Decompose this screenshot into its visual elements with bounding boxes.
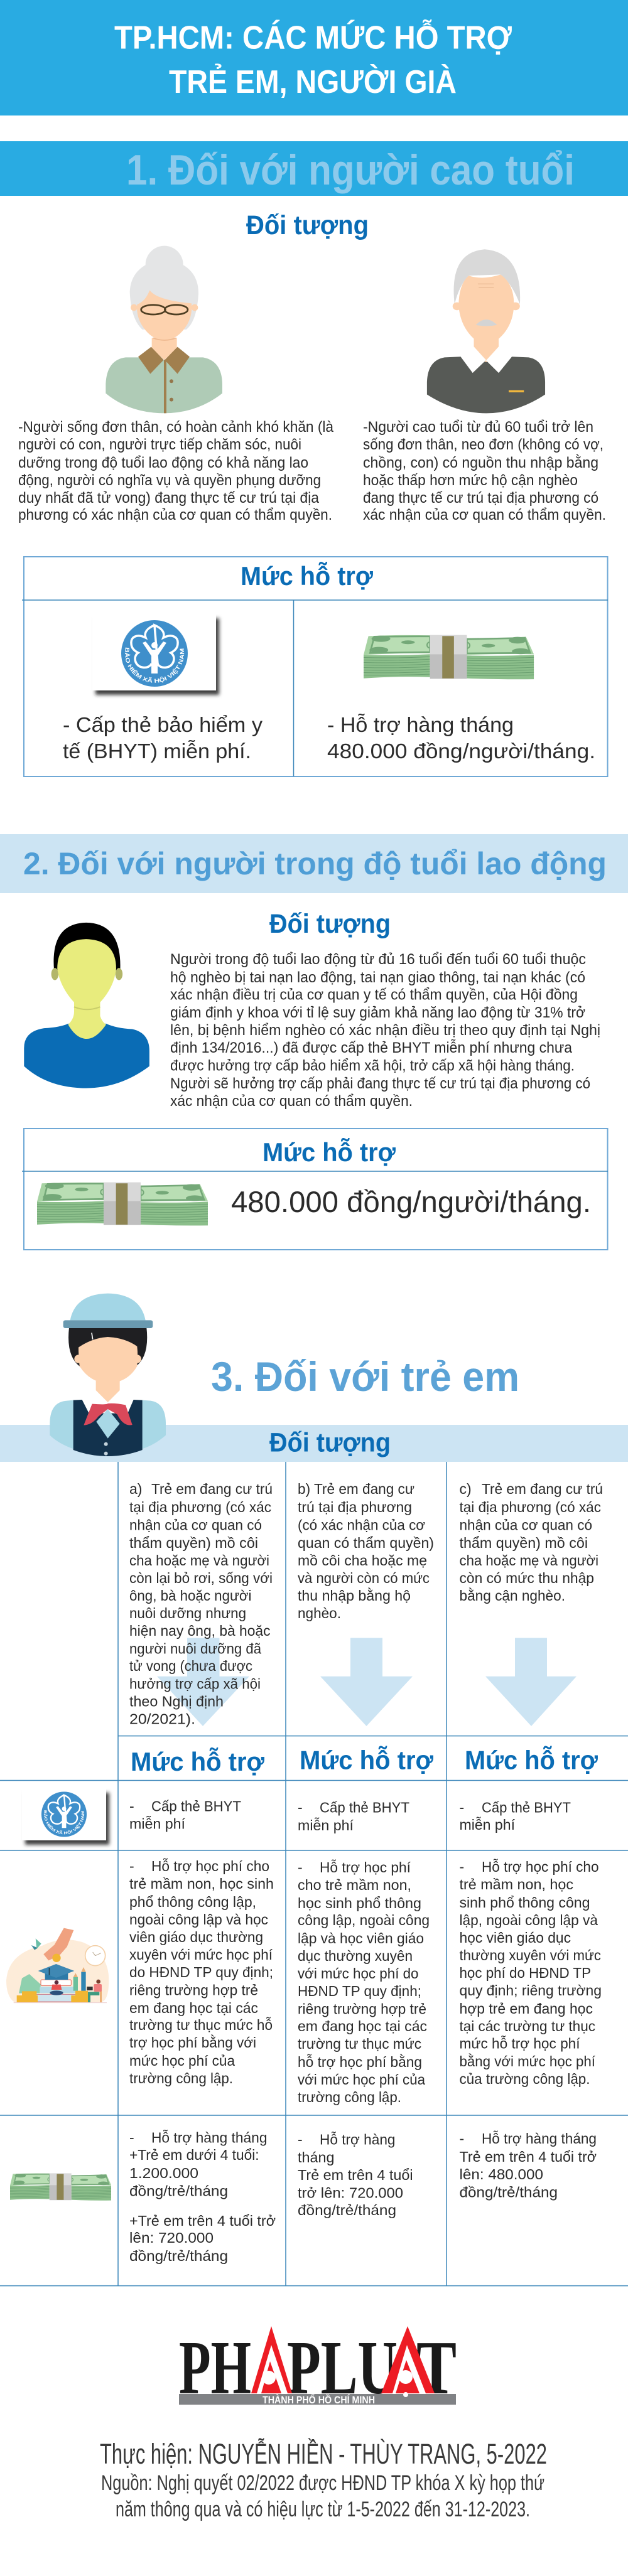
text: working-age criteria: [170, 951, 600, 1110]
text: child group a: thẩm quyền) mồ côi: [129, 1535, 258, 1551]
text: working-age criteria: định 134/2016...) đã được cấp thẻ BHYT miễn phí nhưng chưa: [170, 1039, 573, 1056]
logo: Pháp Luật newspaper: THÀNH PHỐ HỒ CHÍ MINH: [263, 2393, 375, 2406]
text: elderly man criteria: sống đơn thân, neo đơn (không có vợ,: [363, 436, 604, 453]
text: tuition support, column c: bằng với mức học phí: [460, 2053, 596, 2069]
section 1 heading: [0, 141, 628, 196]
table grid: children support: [0, 1462, 628, 2286]
text: free health insurance, columns a b c: miễn phí: [129, 1815, 186, 1832]
text: tuition support, column a: xuyên với mức học phí: [129, 1946, 273, 1963]
panel: support levels, section 2: [22, 1129, 608, 1250]
text: child group b: quan có thẩm quyền): [298, 1535, 434, 1551]
text: child group b: (có xác nhận của cơ: [298, 1516, 425, 1533]
text: free health insurance, columns a b c: -: [298, 1799, 303, 1815]
icon: social insurance logo: BẢO HIỂM XÃ HỘI VIỆT NAM: [124, 648, 185, 683]
text: health insurance card: - Cấp thẻ bảo hiểm y: [63, 713, 263, 736]
text: child group a: tại địa phương (có xác: [129, 1499, 271, 1515]
text: tuition support, column a: em đang học tại các: [129, 2000, 258, 2016]
icon: working-age person: [24, 923, 149, 1088]
text: free health insurance, columns a b c: Cấp thẻ BHYT: [482, 1799, 571, 1815]
text: tuition support, column c: sinh phổ thông công: [460, 1894, 590, 1911]
text: elderly woman criteria: động, người có nghĩa vụ và quyền phụng dưỡng: [18, 472, 321, 489]
text: child group b: mồ côi cha hoặc mẹ: [298, 1552, 427, 1569]
text: tuition support, column b: Hỗ trợ học phí: [320, 1859, 411, 1876]
text: tuition support, column a: mức học phí của: [129, 2053, 235, 2069]
text: free health insurance, columns a b c: Cấp thẻ BHYT: [151, 1798, 241, 1814]
text: tuition support, column b: hỗ trợ học phí bằng: [298, 2054, 422, 2070]
text: tuition support, column b: HĐND TP quy định;: [298, 1983, 421, 1999]
text: working-age criteria: hộ nghèo bị tai nạn lao động, tai nạn giao thông, tai nạn khác (có: [170, 969, 585, 986]
text: tuition support, column c: lập, ngoài công lập và: [460, 1912, 598, 1928]
text: child group b: [298, 1481, 434, 1621]
text: working-age criteria: lên, bị bệnh hiểm nghèo có xác nhận điều trị theo quy định tại Nghị: [170, 1022, 600, 1039]
text: monthly support, column b: tháng: [298, 2149, 334, 2165]
text: tuition support, column a: do HĐND TP quy định;: [129, 1964, 273, 1980]
text: monthly support, column b: trở lên: 720.000: [298, 2184, 403, 2201]
text: tuition support, column b: công lập, ngoài công: [298, 1912, 430, 1928]
text: elderly woman criteria: người có con, người trực tiếp chăm sóc, nuôi: [18, 436, 301, 453]
title banner: TP.HCM: CÁC MỨC HỖ TRỢ: [114, 19, 512, 56]
text: child group a: ông, bà hoặc người: [129, 1587, 251, 1604]
heading: support levels: Mức hỗ trợ: [263, 1137, 396, 1167]
text: working-age criteria: giám định y khoa với tỉ lệ suy giảm khả năng lao động từ 31% trở: [170, 1004, 585, 1021]
text: child group c: thẩm quyền) mồ côi: [460, 1535, 588, 1551]
headings: support levels per column: Mức hỗ trợ: [300, 1745, 433, 1775]
icon: social insurance logo: [92, 615, 222, 698]
text: tuition support, column b: em đang học tại các: [298, 2018, 427, 2034]
text: child group c: bằng cận nghèo.: [460, 1587, 565, 1604]
text: tuition support, column a: trường công lập.: [129, 2070, 233, 2086]
text: health insurance card: [63, 713, 263, 763]
text: tuition support, column c: trẻ mầm non, học: [460, 1876, 573, 1892]
text: tuition support, column c: của trường công lập.: [460, 2071, 590, 2087]
title banner: TRẺ EM, NGƯỜI GIÀ: [169, 63, 457, 100]
text: tuition support, column a: riêng trường hợp trẻ: [129, 1982, 258, 1999]
text: elderly woman criteria: duy nhất đã tử vong) đang thực tế cư trú tại địa: [18, 490, 320, 507]
section 2 heading: 2. Đối với người trong độ tuổi lao động: [23, 846, 607, 881]
text: monthly allowance: [327, 713, 595, 763]
text: child group a: tử vong (chưa được: [129, 1658, 252, 1674]
text: child group c: nhận của cơ quan có: [460, 1516, 592, 1533]
text: child group a: nuôi dưỡng nhưng: [129, 1605, 246, 1621]
text: tuition support, column a: trẻ mầm non, học sinh: [129, 1876, 274, 1892]
text: monthly support, column c: Trẻ em trên 4 tuổi trở: [460, 2149, 597, 2165]
text: child group a: a): [129, 1481, 142, 1497]
text: monthly support, column b: [298, 2132, 413, 2218]
icon: social insurance logo, small: BẢO HIỂM XÃ HỘI VIỆT NAM: [44, 1810, 84, 1834]
logo: Pháp Luật newspaper: PLU: [287, 2326, 398, 2410]
text: monthly support, column b: Hỗ trợ hàng: [320, 2132, 396, 2148]
text: child group a: nhận của cơ quan có: [129, 1516, 262, 1533]
arrow: column c: [485, 1638, 577, 1726]
text: tuition support, column c: hợp trẻ em đang học: [460, 2000, 593, 2017]
text: tuition support, column c: [460, 1859, 602, 2087]
text: monthly support, column c: đồng/trẻ/tháng: [460, 2184, 558, 2201]
text: working-age criteria: xác nhận điều trị của cơ quan y tế có thẩm quyền, của Hội đồng: [170, 987, 578, 1003]
text: child group a: Trẻ em đang cư trú: [151, 1481, 273, 1497]
text: tuition support, column b: [298, 1859, 430, 2105]
text: monthly support, column b: đồng/trẻ/tháng: [298, 2202, 396, 2218]
text: monthly support, column c: lên: 480.000: [460, 2166, 543, 2182]
text: tuition support, column a: Hỗ trợ học phí cho: [151, 1858, 269, 1874]
text: tuition support, column a: phổ thông công lập,: [129, 1894, 256, 1910]
text: child group b: thu nhập bằng hộ: [298, 1587, 411, 1604]
text: free health insurance, columns a b c: -: [129, 1798, 134, 1814]
text: elderly woman criteria: phương có xác nhận của cơ quan có thẩm quyền.: [18, 507, 332, 523]
target group band: [0, 1425, 628, 1462]
icon: social insurance logo, small: [22, 1790, 112, 1848]
section 2 heading: [0, 834, 628, 893]
icon: elderly man: [427, 249, 545, 413]
logo: Pháp Luật newspaper: PH: [179, 2326, 251, 2410]
arrow: column a: [157, 1638, 249, 1726]
text: tuition support, column c: học viên giáo dục: [460, 1929, 571, 1946]
text: tuition support, column c: quy định; riêng trường: [460, 1982, 602, 1999]
title banner: [0, 0, 628, 115]
text: child group a: người nuôi dưỡng đã: [129, 1641, 261, 1657]
text: tuition support, column c: học phí do HĐND TP: [460, 1965, 591, 1981]
text: health insurance card: tế (BHYT) miễn phí.: [63, 739, 251, 763]
text: child group a: [129, 1481, 273, 1727]
text: elderly man criteria: [363, 419, 606, 523]
text: free health insurance, columns a b c: Cấp thẻ BHYT: [320, 1799, 409, 1815]
arrow: column b: [320, 1638, 413, 1726]
icon: cash stack: [364, 635, 534, 679]
text: monthly support, column a: +Trẻ em trên 4 tuổi trở: [129, 2213, 276, 2229]
panel: support levels, section 1: [22, 556, 608, 777]
text: monthly support, column a: đồng/trẻ/tháng: [129, 2183, 228, 2199]
text: child group a: hưởng trợ cấp xã hội: [129, 1676, 261, 1692]
text: monthly support, column a: +Trẻ em dưới 4 tuổi:: [129, 2147, 259, 2163]
text: monthly support, column b: Trẻ em trên 4 tuổi: [298, 2167, 413, 2183]
text: tuition support, column b: trường tư thục mức: [298, 2036, 421, 2052]
text: monthly support, column a: [129, 2129, 276, 2264]
text: monthly allowance: 480.000 đồng/người/tháng.: [327, 739, 595, 763]
text: elderly woman criteria: -Người sống đơn thân, có hoàn cảnh khó khăn (là: [18, 419, 334, 436]
text: tuition support, column b: riêng trường hợp trẻ: [298, 2001, 426, 2017]
target group band: Đối tượng: [269, 1427, 391, 1457]
heading: support levels: Mức hỗ trợ: [241, 561, 373, 591]
text: elderly man criteria: xác nhận của cơ quan có thẩm quyền.: [363, 507, 606, 523]
icon: child: [50, 1294, 166, 1456]
icon: elderly woman: [106, 246, 222, 413]
text: tuition support, column a: viên giáo dục thường: [129, 1929, 263, 1945]
text: tuition support, column a: -: [129, 1858, 134, 1874]
text: free health insurance, columns a b c: [129, 1798, 571, 1833]
icon: cash stack: [37, 1183, 208, 1226]
text: tuition support, column b: với mức học phí của: [298, 2071, 425, 2088]
text: tuition support, column c: thường xuyên với mức: [460, 1947, 601, 1963]
text: tuition support, column b: với mức học phí do: [298, 1965, 418, 1982]
text: monthly amount: 480.000 đồng/người/tháng.: [231, 1185, 591, 1218]
text: elderly woman criteria: dưỡng trong độ tuổi lao động có khả năng lao: [18, 454, 308, 471]
text: monthly support, column c: [460, 2130, 597, 2201]
text: child group b: b) Trẻ em đang cư: [298, 1481, 414, 1497]
text: tuition support, column c: Hỗ trợ học phí cho: [482, 1859, 599, 1875]
text: elderly man criteria: hoặc thấp hơn mức hộ cận nghèo: [363, 472, 578, 489]
text: tuition support, column a: ngoài công lập và học: [129, 1911, 268, 1928]
text: child group c: Trẻ em đang cư trú: [482, 1481, 603, 1497]
text: child group c: [460, 1481, 603, 1604]
text: child group c: còn có mức thu nhập: [460, 1570, 594, 1586]
text: tuition support, column b: cho trẻ mầm non,: [298, 1877, 411, 1893]
text: free health insurance, columns a b c: miễn phí: [298, 1817, 354, 1833]
text: monthly support, column a: -: [129, 2129, 134, 2145]
text: elderly man criteria: đang thực tế cư trú tại địa phương có: [363, 490, 598, 507]
text: working-age criteria: xác nhận của cơ quan có thẩm quyền.: [170, 1093, 413, 1110]
icon: education support illustration: [6, 1928, 109, 2003]
text: elderly man criteria: -Người cao tuổi từ đủ 60 tuổi trở lên: [363, 419, 593, 436]
text: tuition support, column c: -: [460, 1859, 464, 1875]
text: tuition support, column c: mức hỗ trợ học phí: [460, 2035, 580, 2051]
heading: target group, section 1: Đối tượng: [246, 210, 369, 240]
text: monthly support, column c: -: [460, 2130, 464, 2147]
text: free health insurance, columns a b c: -: [460, 1799, 464, 1815]
text: child group b: trú tại địa phương: [298, 1499, 412, 1515]
text: monthly support, column b: -: [298, 2132, 303, 2148]
heading: target group, section 2: Đối tượng: [269, 909, 391, 939]
icon: cash stack, small: [10, 2173, 111, 2201]
text: tuition support, column c: tại các trường tư thục: [460, 2018, 595, 2034]
headings: support levels per column: [131, 1745, 598, 1776]
section 1 heading: 1. Đối với người cao tuổi: [126, 146, 575, 194]
text: child group c: tại địa phương (có xác: [460, 1499, 601, 1515]
text: tuition support, column a: trợ học phí bằng với: [129, 2034, 256, 2051]
text: elderly woman criteria: [18, 419, 334, 523]
text: tuition support, column b: học sinh phổ thông: [298, 1895, 421, 1911]
text: child group b: nghèo.: [298, 1605, 341, 1621]
logo: Pháp Luật newspaper: T: [416, 2326, 457, 2410]
section 3 heading: 3. Đối với trẻ em: [211, 1353, 519, 1400]
text: tuition support, column b: lập và học viên giáo: [298, 1930, 424, 1946]
logo: Pháp Luật newspaper: [179, 2326, 457, 2410]
text: elderly man criteria: chồng, con) có nguồn thu nhập bằng: [363, 454, 598, 471]
text: tuition support, column a: [129, 1858, 274, 2086]
text: working-age criteria: được hưởng trợ cấp bảo hiểm xã hội, trở cấp xã hội hàng tháng.: [170, 1057, 575, 1075]
text: child group a: 20/2021).: [129, 1711, 195, 1727]
text: child group a: theo Nghị định: [129, 1693, 224, 1710]
text: monthly support, column a: Hỗ trợ hàng tháng: [151, 2129, 268, 2145]
text: monthly support, column a: đồng/trẻ/tháng: [129, 2248, 228, 2264]
headings: support levels per column: Mức hỗ trợ: [131, 1746, 264, 1776]
headings: support levels per column: Mức hỗ trợ: [465, 1745, 598, 1775]
text: free health insurance, columns a b c: miễn phí: [460, 1817, 516, 1833]
text: child group a: hiện nay ông, bà hoặc: [129, 1623, 270, 1639]
text: monthly support, column a: 1.200.000: [129, 2165, 198, 2181]
footer credits and source: [100, 2438, 547, 2521]
text: child group a: cha hoặc mẹ và người: [129, 1552, 269, 1569]
text: child group c: c): [460, 1481, 472, 1497]
text: monthly support, column a: lên: 720.000: [129, 2230, 214, 2246]
arrows behind the table: [157, 1638, 577, 1726]
text: tuition support, column b: dục thường xuyên: [298, 1948, 413, 1964]
text: child group a: còn lại bỏ rơi, sống với: [129, 1570, 273, 1586]
text: tuition support, column b: trường công lập.: [298, 2089, 401, 2105]
text: tuition support, column a: trường tư thục mức hỗ: [129, 2017, 273, 2033]
text: working-age criteria: Người sẽ hưởng trợ cấp phải đang thực tế cư trú tại địa phương có: [170, 1075, 590, 1092]
text: child group b: và người còn có mức: [298, 1570, 430, 1586]
text: working-age criteria: Người trong độ tuổi lao động từ đủ 16 tuổi đến tuổi 60 tuổi thuộc: [170, 951, 586, 968]
text: tuition support, column b: -: [298, 1859, 303, 1876]
text: monthly support, column c: Hỗ trợ hàng tháng: [482, 2130, 597, 2147]
text: monthly allowance: - Hỗ trợ hàng tháng: [327, 713, 514, 736]
text: child group c: cha hoặc mẹ và người: [460, 1552, 598, 1569]
